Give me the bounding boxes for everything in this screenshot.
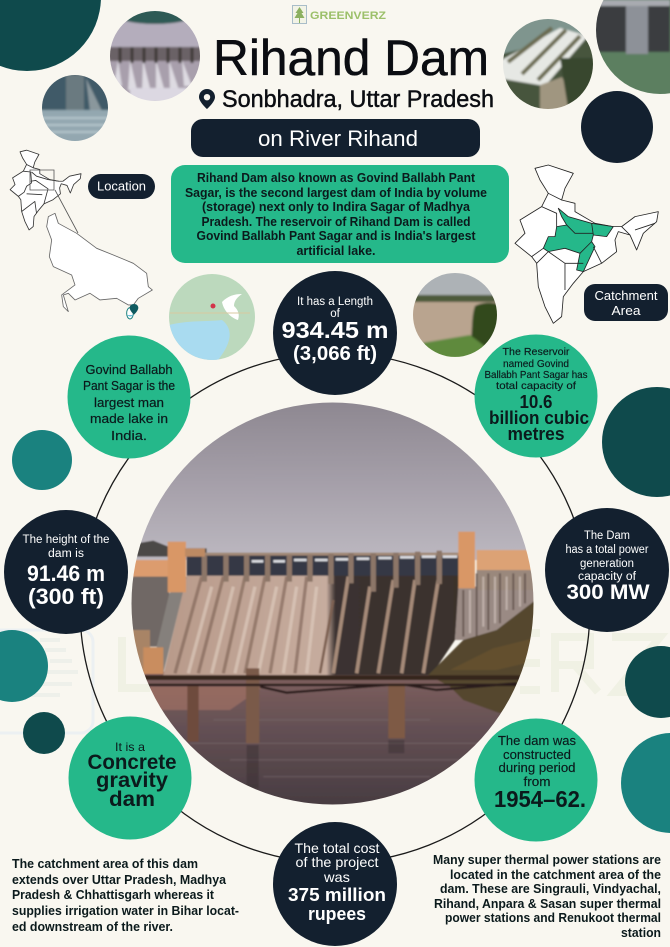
location map: India small	[10, 150, 81, 230]
node: reservoir capacity: billion cubic	[489, 408, 589, 428]
decorative circle: top left dark	[0, 0, 101, 71]
node: concrete gravity dam: Concrete	[88, 751, 176, 774]
intro text panel: (storage) next only to Indira Sagar of Madhya	[202, 200, 471, 214]
photo: spillway top right	[503, 19, 593, 109]
thermal power stations text: located in the catchment area of the	[450, 868, 661, 882]
node: project cost: of the project	[296, 854, 379, 870]
thermal power stations text: Many super thermal power stations are	[433, 853, 661, 867]
node: project cost: was	[323, 869, 350, 885]
node: length: of	[330, 308, 341, 320]
node: power capacity: capacity of	[578, 571, 637, 583]
node: construction period: 1954–62.	[494, 786, 586, 812]
river pill	[191, 119, 480, 157]
decorative circle: left small dark	[23, 712, 65, 754]
decorative circle: left mid teal	[0, 630, 48, 702]
photo: map of reservoir	[169, 274, 255, 360]
node: largest man made lake	[68, 336, 190, 458]
node: largest man made lake: India.	[111, 428, 147, 443]
photo: dam and water left	[42, 75, 108, 141]
intro text panel: artificial lake.	[296, 244, 376, 258]
node: power capacity: generation	[580, 558, 634, 570]
node: largest man made lake: made lake in	[90, 411, 168, 426]
node: reservoir capacity: named Govind	[503, 358, 569, 370]
node: power capacity: 300 MW	[566, 581, 650, 604]
node: construction period	[474, 718, 598, 842]
catchment pill	[584, 284, 668, 321]
intro text panel	[171, 165, 509, 263]
ring connector	[80, 353, 590, 863]
location pill: Location	[97, 180, 146, 194]
node: height: (300 ft)	[28, 584, 104, 609]
thermal power stations text: power stations and Renukoot thermal	[445, 911, 661, 925]
intro text panel: Govind Ballabh Pant Sagar and is India's largest	[196, 229, 476, 243]
node: concrete gravity dam: gravity	[96, 769, 168, 792]
catchment description text: ed downstream of the river.	[12, 920, 173, 934]
node: reservoir capacity: The Reservoir	[502, 346, 570, 358]
node: project cost: The total cost	[294, 840, 380, 856]
catchment description text	[12, 857, 239, 934]
node: reservoir capacity: total capacity of	[496, 380, 576, 392]
node: construction period: The dam was	[498, 733, 576, 748]
main photo: Rihand dam	[130, 400, 540, 810]
node: reservoir capacity	[474, 334, 598, 458]
location pill	[88, 174, 155, 199]
node: reservoir capacity: 10.6	[520, 392, 552, 412]
node: height: 91.46 m	[27, 561, 105, 586]
node: construction period: during period	[498, 760, 576, 775]
intro text panel: Pradesh. The reservoir of Rihand Dam is called	[202, 215, 470, 229]
node: power capacity: The Dam	[584, 530, 630, 542]
catchment description text: supplies irrigation water in Bihar locat-	[12, 904, 239, 918]
decorative circle: right mid dark	[625, 646, 670, 718]
node: height: dam is	[48, 548, 84, 560]
node: construction period: constructed	[503, 747, 571, 762]
photo: top right dam	[590, 0, 670, 96]
location subtitle: Sonbhadra, Uttar Pradesh	[222, 86, 494, 113]
node: length: It has a Length	[297, 296, 373, 308]
catchment map: India	[515, 165, 658, 323]
node: project cost	[273, 822, 397, 946]
thermal power stations text: dam. These are Singrauli, Vindyachal,	[440, 882, 661, 896]
location map: Uttar Pradesh	[47, 213, 152, 319]
node: largest man made lake: largest man	[94, 395, 164, 410]
thermal power stations text	[433, 853, 661, 940]
intro text panel: Sagar, is the second largest dam of India by volume	[185, 186, 487, 200]
catchment pill: Area	[612, 304, 641, 318]
decorative circle: left teal	[12, 430, 72, 490]
title: Rihand Dam	[213, 30, 489, 86]
node: construction period: from	[524, 774, 550, 789]
node: reservoir capacity: metres	[508, 424, 564, 444]
logo: GREENVERZ	[310, 10, 386, 22]
catchment pill: Catchment	[594, 289, 658, 303]
node: height: The height of the	[22, 534, 110, 546]
thermal power stations text: Rihand, Anpara & Sasan super thermal	[434, 897, 661, 911]
decorative circle: small dark navy top right	[581, 91, 653, 163]
location map: zoom box and leader line	[30, 170, 78, 233]
node: length	[273, 271, 397, 395]
photo: spillway top left	[110, 11, 200, 101]
node: concrete gravity dam	[68, 716, 192, 840]
river pill: on River Rihand	[258, 126, 418, 151]
catchment description text: extends over Uttar Pradesh, Madhya	[12, 873, 227, 887]
node: reservoir capacity: Ballabh Pant Sagar has	[484, 369, 588, 381]
catchment description text: Pradesh & Chhattisgarh whereas it	[12, 888, 215, 902]
thermal power stations text: station	[621, 926, 661, 940]
node: length: 934.45 m	[282, 317, 388, 343]
decorative circle: right dark teal	[602, 387, 670, 497]
node: concrete gravity dam: It is a	[115, 740, 145, 754]
decorative circle: right bottom teal	[621, 733, 670, 833]
node: length: (3,066 ft)	[293, 343, 377, 365]
node: power capacity: has a total power	[566, 544, 649, 556]
node: project cost: 375 million	[288, 885, 386, 905]
node: project cost: rupees	[308, 904, 366, 924]
node: power capacity	[545, 508, 669, 632]
node: height	[4, 510, 128, 634]
node: largest man made lake: Pant Sagar is the	[83, 378, 175, 393]
node: concrete gravity dam: dam	[109, 788, 155, 811]
photo: river	[413, 273, 497, 357]
catchment description text: The catchment area of this dam	[12, 857, 198, 871]
intro text panel: Rihand Dam also known as Govind Ballabh Pant	[197, 171, 476, 185]
node: largest man made lake: Govind Ballabh	[86, 362, 172, 377]
logo	[292, 6, 386, 24]
watermark	[0, 630, 668, 733]
